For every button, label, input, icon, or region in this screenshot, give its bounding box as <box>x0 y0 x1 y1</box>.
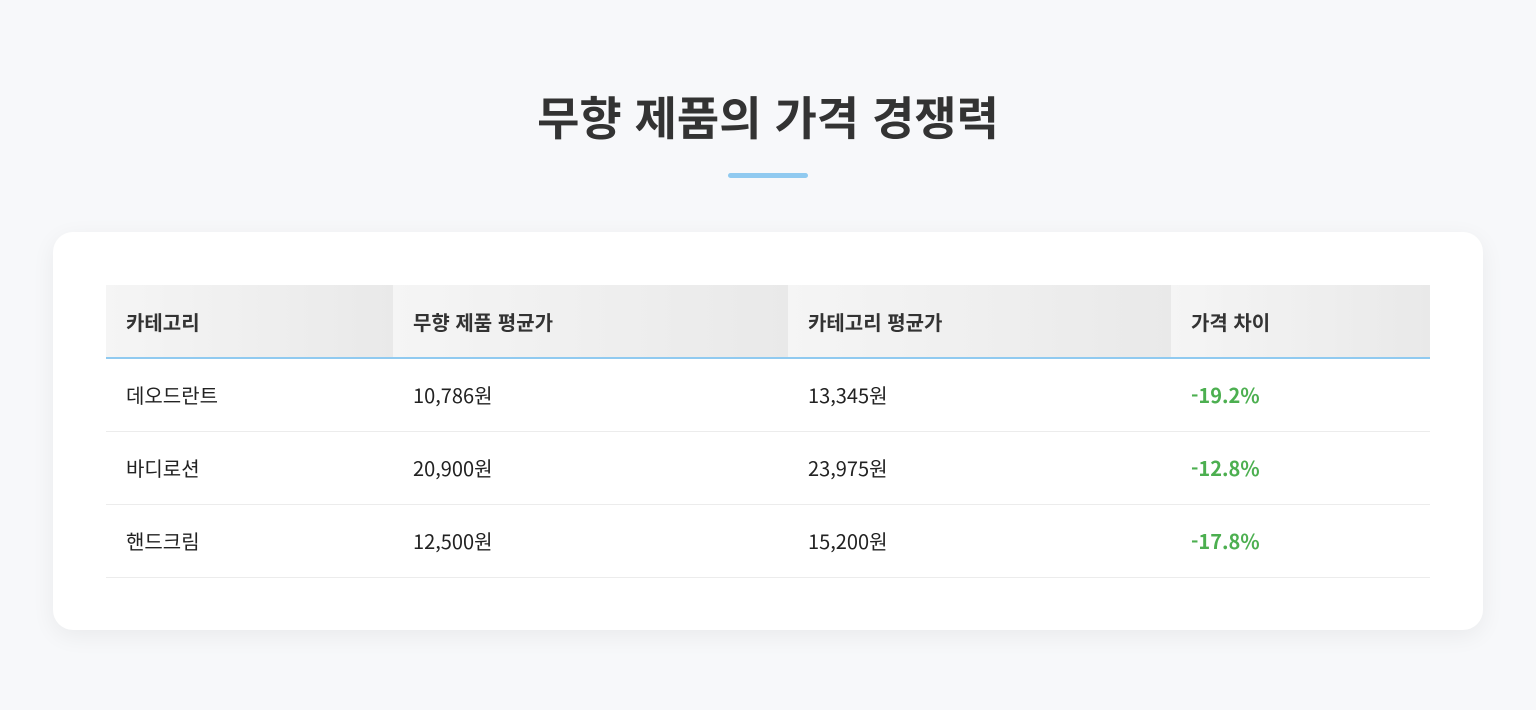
table: price comparison: 가격 차이 <box>1191 306 1270 336</box>
table: price comparison: 무향 제품 평균가 <box>413 306 553 336</box>
table: price comparison: 카테고리 평균가 <box>808 306 942 336</box>
table: price comparison: 15,200원 <box>808 526 887 555</box>
table: price comparison: 바디로션 <box>126 453 200 482</box>
table: price comparison: 카테고리 <box>126 306 200 336</box>
table: price comparison: 13,345원 <box>808 380 887 409</box>
table: price comparison <box>106 285 1430 578</box>
table: price comparison: 10,786원 <box>413 380 492 409</box>
table: price comparison: 23,975원 <box>808 453 887 482</box>
table: price comparison: 12,500원 <box>413 526 492 555</box>
table: price comparison: -19.2% <box>1191 380 1260 409</box>
panel: price table card <box>53 232 1483 630</box>
table: price comparison: -12.8% <box>1191 453 1260 482</box>
title underline <box>728 173 808 178</box>
table: price comparison: 20,900원 <box>413 453 492 482</box>
title: 무향 제품의 가격 경쟁력 <box>537 83 999 149</box>
table: price comparison: 데오드란트 <box>126 380 218 409</box>
table: price comparison: 핸드크림 <box>126 526 200 555</box>
table: price comparison: -17.8% <box>1191 526 1260 555</box>
